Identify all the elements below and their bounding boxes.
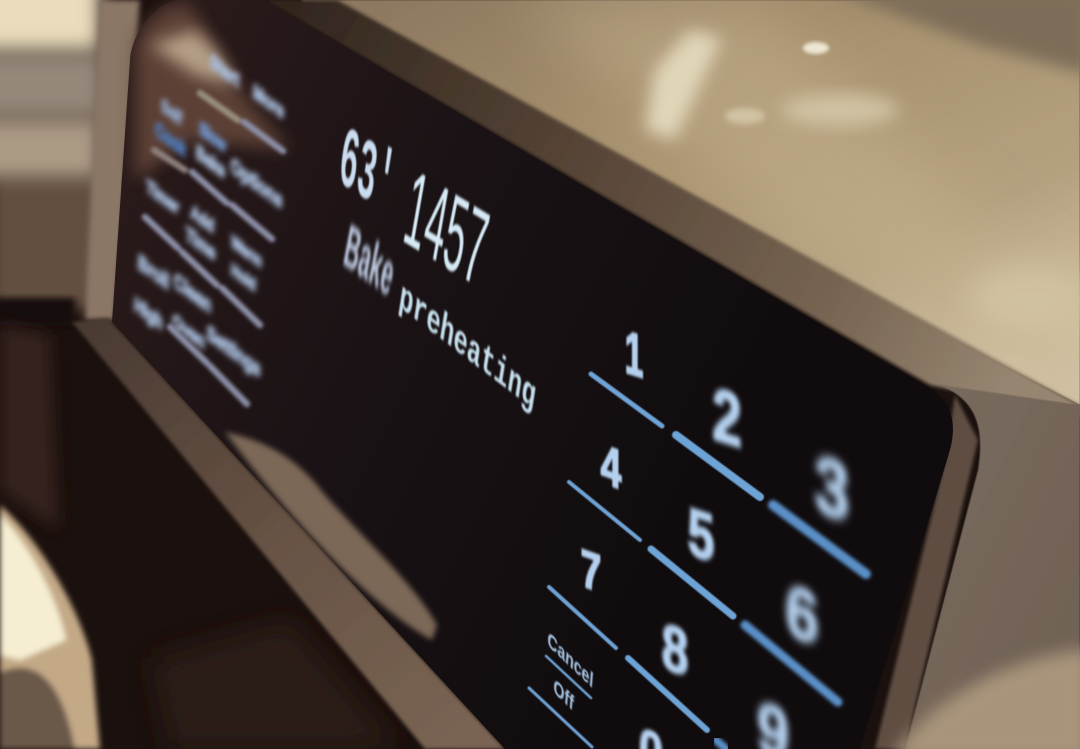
key label: Bake	[195, 118, 227, 183]
display: temperature: 63'	[333, 111, 400, 240]
key label: Options: Options	[230, 154, 283, 214]
key 7: 7	[581, 538, 601, 604]
upper left blurred highlights	[0, 0, 105, 180]
key label: Broil: Broil	[137, 250, 170, 296]
status word: Bake: Bake	[340, 213, 399, 309]
key label: Settings: Settings	[206, 321, 261, 383]
left column key bars	[145, 93, 283, 404]
key label: Add: Time	[185, 222, 216, 265]
display: timer: 1457	[397, 147, 496, 310]
key 6: 6	[785, 568, 819, 662]
right steel frame	[905, 385, 1080, 749]
key label: Clean	[172, 269, 212, 354]
key label: Cook	[155, 95, 187, 162]
key label: Cancel: Cancel	[547, 628, 594, 694]
key 4: 4	[601, 433, 622, 502]
panel chamfered edge	[265, 0, 1080, 418]
key label: Warm: Warm	[231, 232, 262, 272]
key label: Warm: Hold	[230, 260, 256, 296]
key label: Add: Add	[190, 200, 215, 238]
bright reflection upper left	[150, 30, 235, 85]
keypad bars	[529, 374, 866, 749]
key label: Timer: Timer	[146, 175, 180, 219]
blurred object lower right	[890, 648, 1080, 749]
display: status	[340, 213, 538, 422]
surface shading	[520, 0, 1080, 400]
number keypad	[581, 318, 849, 749]
key label: Off: Off	[553, 675, 575, 717]
key label: Bake: Bake	[195, 139, 226, 183]
key label: Clean: Clean	[173, 269, 212, 319]
key 8: 8	[662, 610, 688, 691]
black display glass	[112, 0, 953, 749]
key label: Cook: Self	[160, 95, 183, 130]
key label: More: More	[252, 79, 285, 124]
key 2: 2	[712, 371, 742, 464]
key label: Add	[185, 200, 216, 265]
towel at lower left	[0, 505, 100, 749]
key 5: 5	[688, 493, 714, 577]
surface reflection	[645, 30, 722, 140]
glass reflection of handle	[225, 432, 437, 640]
key label: Broil: High	[133, 292, 164, 335]
left column soft-key labels	[133, 49, 285, 383]
key 1: 1	[625, 318, 643, 391]
key label: Bake: Slow	[199, 118, 227, 157]
left steel frame post	[85, 0, 140, 320]
status word: preheating: preheating	[396, 276, 538, 422]
key label: Start: Start	[209, 49, 240, 92]
top right corner shadow	[830, 0, 1080, 75]
key label: Broil	[133, 250, 170, 335]
glass reflection upper left	[135, 4, 290, 180]
key label: Cook: Cook	[155, 117, 187, 162]
key label: Clean: Oven	[172, 309, 205, 354]
lower steel trim	[72, 318, 505, 749]
top metal surface	[300, 0, 1080, 405]
key 3: 3	[815, 437, 849, 539]
key label: Warm	[230, 232, 262, 296]
